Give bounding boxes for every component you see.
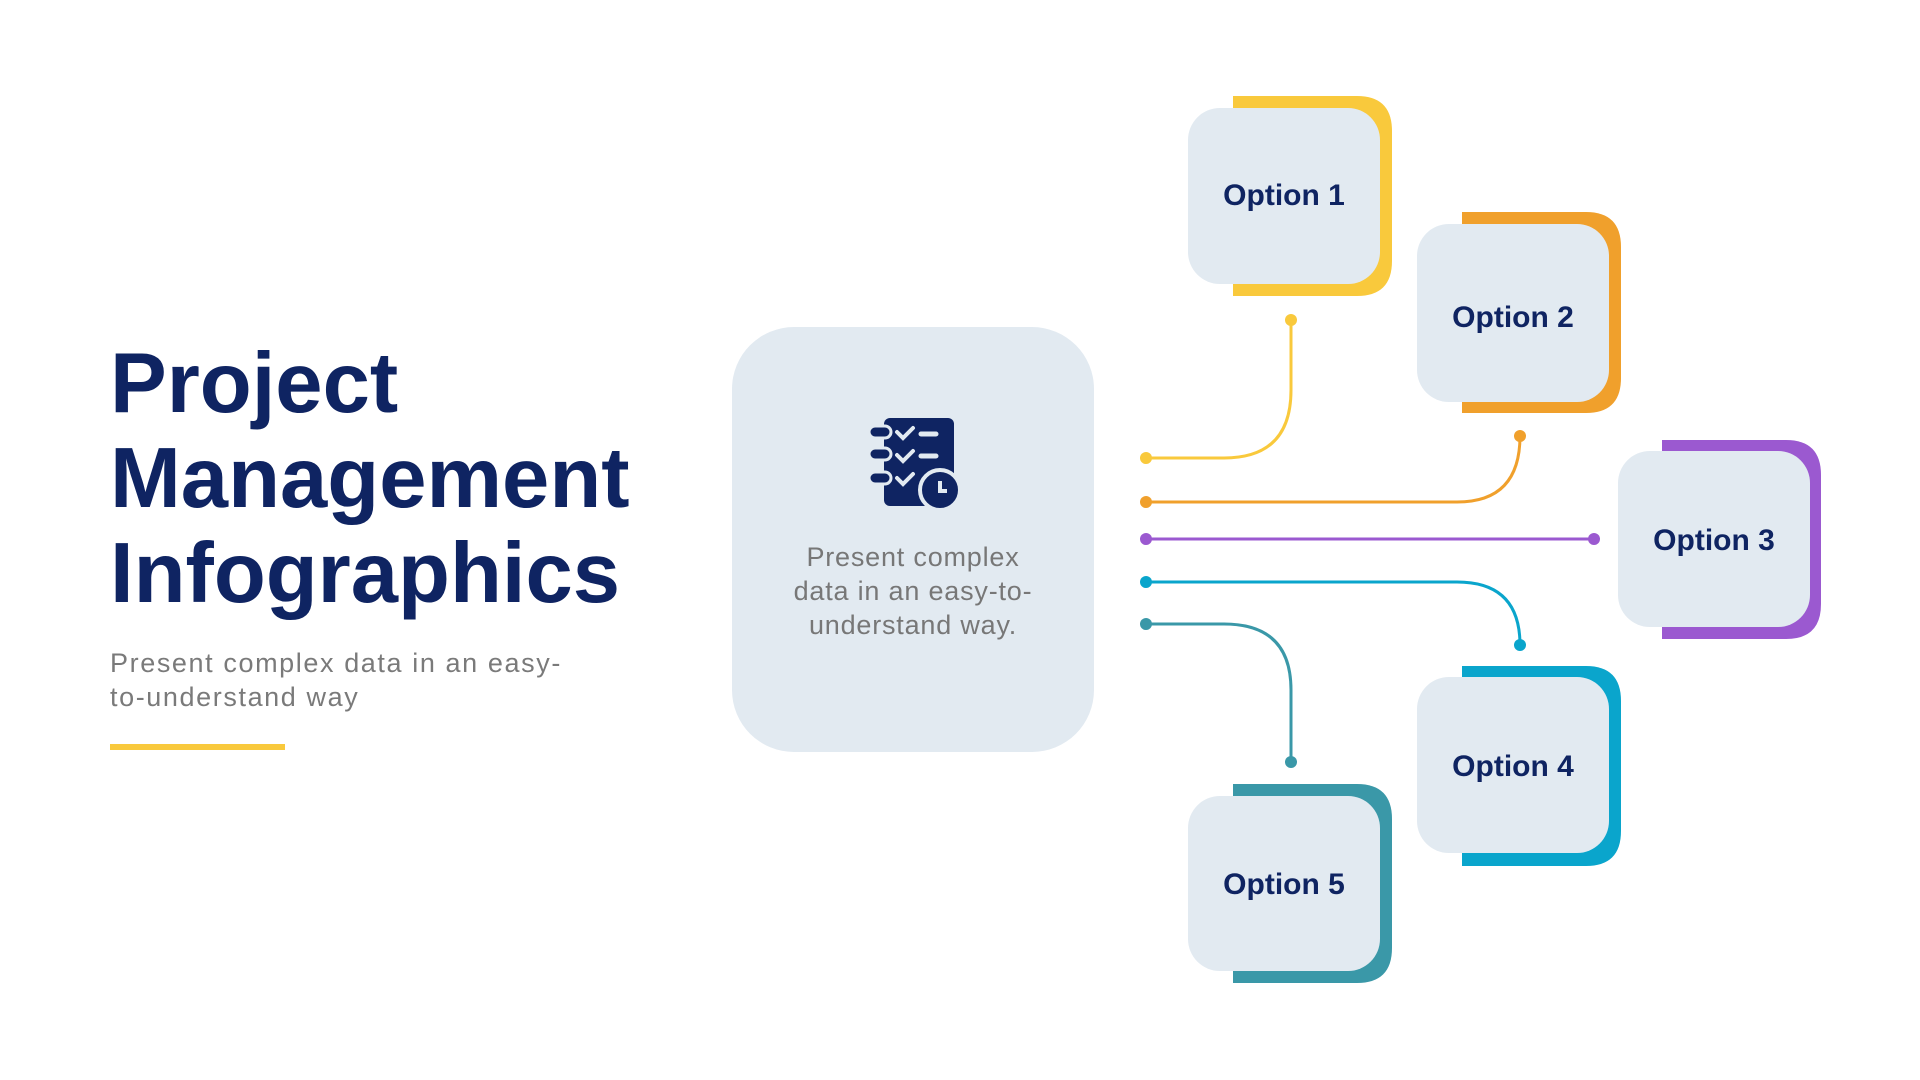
connector: option 5 (1140, 618, 1297, 768)
option 3: Option 3 (1653, 524, 1775, 557)
text: card description: data in an easy-to- (794, 576, 1032, 606)
panel: central card (732, 327, 1094, 752)
connector: option 1 (1140, 314, 1297, 464)
option 4: Option 4 (1452, 750, 1574, 783)
option 5: Option 5 (1223, 868, 1345, 901)
option 4 (1417, 666, 1621, 866)
option 3 (1618, 440, 1821, 639)
accent bar (110, 744, 285, 750)
connector: option 2 (1140, 430, 1526, 508)
subtitle: to-understand way (110, 682, 359, 712)
icon: checklist with clock (869, 418, 960, 510)
subtitle: Present complex data in an easy- (110, 648, 562, 678)
text: card description: Present complex (806, 542, 1020, 572)
option 2 (1417, 212, 1621, 413)
title: Management (110, 431, 630, 526)
option 2: Option 2 (1452, 301, 1574, 334)
connector: option 3 (1140, 533, 1600, 545)
option 5 (1188, 784, 1392, 983)
connector: option 4 (1140, 576, 1526, 651)
option 1: Option 1 (1223, 179, 1345, 212)
text: card description: understand way. (809, 610, 1017, 640)
title: Project (110, 336, 398, 431)
title (110, 336, 630, 621)
subtitle (110, 648, 562, 712)
option 1 (1188, 96, 1392, 296)
title: Infographics (110, 526, 620, 621)
